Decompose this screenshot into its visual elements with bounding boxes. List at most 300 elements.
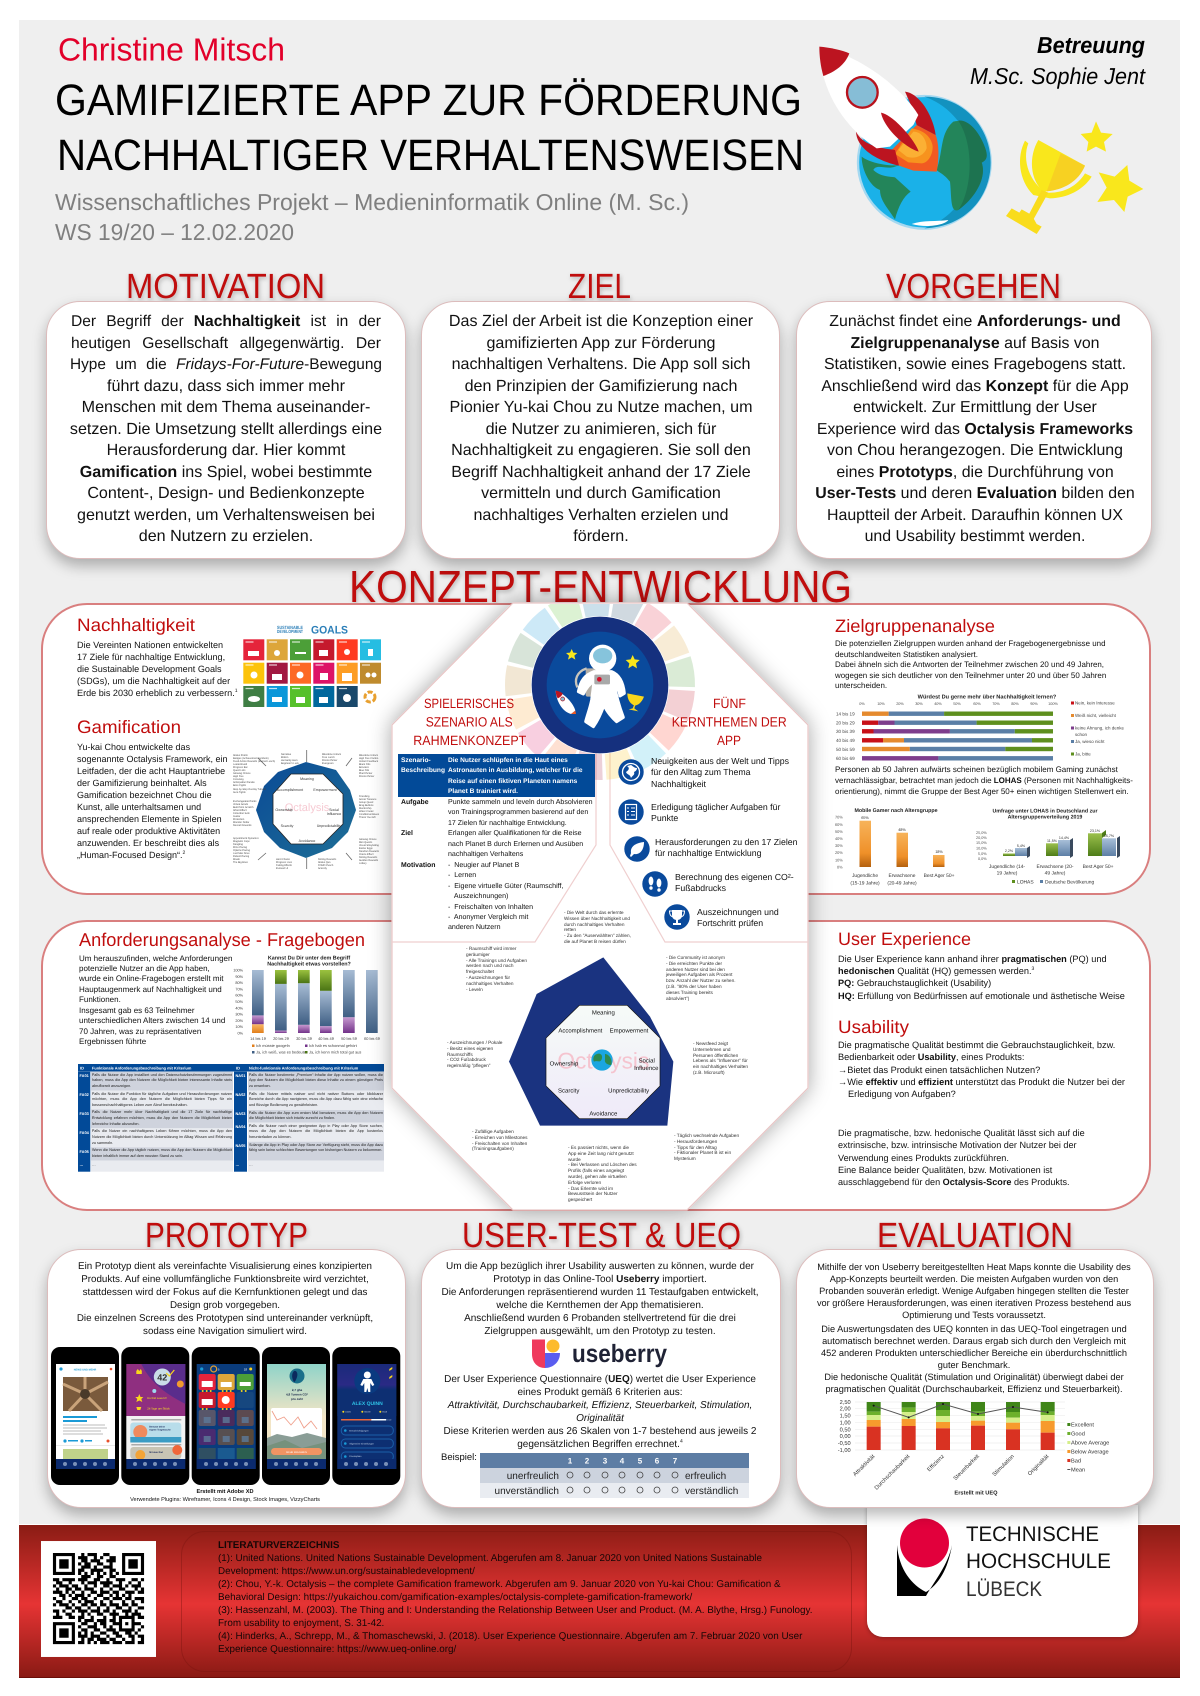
text: evaluation paragraph one: Optimierung und Tests voraussetzt. [902, 1310, 1046, 1320]
chart: Würdest Du gerne mehr über Nachhaltigkeit lernen: 0% [859, 702, 865, 706]
octalysis technique lists: Status Points Badges (Achievement Symbols) Fixed Action Rewards (Earned Lunch) Leaderboard Progress Bar Quest Lists Glowing Choice High Five Crowning Anticipation Parade Boss Fights Step-by-Step Overlay Tutorial Aura Tights [233, 754, 275, 794]
text: UEQ description: Der User Experience Questionnaire (UEQ) wertet die User Experience [444, 1374, 756, 1385]
requirements table: … [236, 1162, 240, 1167]
screen: profile: 15820 [345, 1410, 352, 1414]
text: user test intro: Um die App bezüglich ihrer Usability auswerten zu können, wurde der [446, 1261, 754, 1272]
chart: Mobile Gamer nach Altersgruppe: 40% [835, 836, 843, 841]
text: Gamification: auf reale oder produktive Aktivitäten [77, 826, 220, 836]
literature list: Behavioral Design: https://yukaichou.com/gamification-examples/octalysis-complete-gamification-framework/ [218, 1592, 692, 1603]
logo text: TECHNISCHE [966, 1523, 1099, 1546]
UEQ example scale table: verständlich [685, 1486, 738, 1497]
requirements table: … [80, 1162, 84, 1167]
chart: UEQ benchmark: Steuerbarkeit [952, 1453, 980, 1481]
text: user test intro: Prototyp in das Online-Tool Useberry importiert. [493, 1274, 707, 1285]
chart: Umfrage unter LOHAS: 15,7% [1104, 834, 1115, 838]
requirements table: Solange die App in Play oder App Store zur Verfügung steht, muss die App dazu fähig sein keine schlechten Bewertungen von bisherigen Nutzern zu bekommen. [249, 1142, 383, 1152]
octagon: central concept panel [378, 590, 822, 1224]
logo mark [897, 1518, 952, 1596]
screen: profile: Allgemeine Einstellungen [349, 1442, 375, 1445]
chart: Umfrage unter LOHAS: 49 Jahre) [1045, 870, 1066, 876]
callout: meaning: - Die Welt durch das erlernte Wissen über Nachhaltigkeit und durch nachhaltiges Verhalten retten - Zu den "Auserwählten" zählen, die auf Planet B reisen dürfen [564, 910, 631, 944]
chart: UEQ benchmark: Above Average [1071, 1439, 1109, 1446]
text: Gamification [77, 742, 228, 860]
text: Anforderungsanalyse: Ergebnissen führte [79, 1037, 146, 1046]
theme text: challenges: Herausforderungen zu den 17 Zielen [655, 836, 798, 846]
requirements table: … [92, 1163, 96, 1167]
requirements table: NA01 [236, 1073, 246, 1078]
chart: Würdest Du gerne mehr über Nachhaltigkeit lernen: keine Ahnung, ich denke [1075, 726, 1125, 730]
chart: UEQ benchmark: Below Average [1071, 1448, 1109, 1455]
octalysis technique lists [233, 753, 379, 870]
chart: Umfrage unter LOHAS: Altersgruppenverteilung 2019 [1008, 814, 1082, 820]
text: vorgehen: von Chou herangezogen. Die Entwicklung [827, 442, 1123, 459]
chart: Kannst Du Dir unter dem Begriff Nachhaltigkeit etwas vorstellen: Ja, ich weiß, was es bedeutet [256, 1050, 308, 1054]
text: evaluation paragraph one: Probanden souverän erledigt. Wenige Aufgaben hingegen stellten die Tester [819, 1286, 1129, 1296]
chart: Umfrage unter LOHAS: Jugendliche (14- [989, 864, 1025, 870]
text: motivation: Menschen mit dem Thema auseinander- [82, 398, 370, 416]
icon: checklist [618, 799, 644, 825]
chart: Würdest Du gerne mehr über Nachhaltigkeit lernen: 100% [1048, 702, 1058, 706]
callout: avoidance: - Es passiert nichts, wenn die App eine Zeit lang nicht genutzt wurde - Bei Verlassen und Löschen des Profils (falls eines angelegt wurde), gehen alle virtuellen Erfolge verloren - Das Erlernte wird im Bewusstsein der Nutzer gespeichert [568, 1145, 637, 1202]
octalysis framework diagram: Accomplishment [277, 788, 303, 792]
chart: UEQ benchmark: Erstellt mit UEQ [954, 1489, 998, 1496]
octalysis technique lists: Hard Chains Progress Loss Fading Effects Evolved UI [276, 858, 292, 870]
octalysis framework diagram: Unpredictability [317, 824, 341, 828]
literature list: (4): Hinderks, A., Schrepp, M., & Thomaschewski, J. (2018). User Experience Questionnaire. Abgerufen am 7. Februar 2020 von User [218, 1631, 802, 1642]
text: Zielgruppen intro: unterscheiden. [835, 681, 887, 690]
text: motivation balance: Die pragmatische, bzw. hedonische Qualität lässt sich auf die [838, 1128, 1085, 1138]
chart: Kannst Du Dir unter dem Begriff Nachhaltigkeit etwas vorstellen: 10% [235, 1025, 244, 1029]
text: Gamification: ansprechenden Elemente in Spielen [77, 814, 222, 824]
text: ziel: Das Ziel der Arbeit ist die Konzeption einer [449, 312, 753, 330]
chart: Würdest Du gerne mehr über Nachhaltigkeit lernen: Nein, kein Interesse [1075, 700, 1115, 706]
text: Zielgruppen intro: deutschlandweiten Statistiken analysiert. [835, 650, 978, 658]
chart: UEQ benchmark: Effizienz [926, 1453, 945, 1473]
logo text: HOCHSCHULE [966, 1550, 1111, 1573]
chart: UEQ benchmark [790, 1395, 1140, 1500]
chart: Umfrage unter LOHAS: 19 Jahre) [997, 870, 1018, 876]
chart: Umfrage unter LOHAS: 25,0% [976, 831, 987, 835]
QR code [41, 1541, 156, 1657]
text: Zielgruppen intro [835, 639, 1106, 690]
chart: Umfrage unter LOHAS: 0,0% [978, 857, 987, 861]
screen: profile [337, 1364, 396, 1469]
text: vorgehen: Statistiken, sowie eines Fragebogens statt. [824, 356, 1126, 373]
text: motivation: Hype um die Fridays-For-Future-Bewegung [70, 356, 382, 373]
panel: motivation [46, 301, 406, 559]
UEQ example scale table: 2 [585, 1456, 590, 1466]
chart: Kannst Du Dir unter dem Begriff Nachhaltigkeit etwas vorstellen: 70% [235, 987, 244, 991]
chart: Kannst Du Dir unter dem Begriff Nachhaltigkeit etwas vorstellen: 90% [235, 975, 244, 979]
task and goal text: - Eigene virtuelle Güter (Raumschiff, [448, 883, 563, 890]
chart: Umfrage unter LOHAS: 5,0% [978, 852, 987, 856]
icon: leaf [624, 836, 650, 862]
panel: konzept lower band [41, 920, 1151, 1211]
chart: Umfrage unter LOHAS: LOHAS [1017, 880, 1034, 886]
screen: goals: 18 [244, 1368, 247, 1372]
octalysis technique lists: Glowing Choice Mini Quests Visual Storytelling Easter Eggs Random Rewards Oracle Effect Rolling Rewards Sudden Rewards Lottery [359, 838, 379, 865]
requirements table: FA05 [80, 1149, 90, 1154]
chart: Würdest Du gerne mehr über Nachhaltigkeit lernen: 80% [1011, 702, 1019, 706]
octalysis framework diagram: Avoidance [299, 839, 315, 843]
theme text: awards: Auszeichnungen und [697, 906, 779, 916]
callout: social influence: - Newsfeed zeigt Unternehmen und Personen öffentlichen Lebens als "Influencer" für ein nachhaltiges Verhalten (z.B. Microsoft) [693, 1041, 748, 1075]
text: SPIELERISCHES [424, 696, 514, 711]
chart: Umfrage unter LOHAS: Erwachsene (20- [1037, 864, 1074, 870]
octalysis technique lists: Friending Social Treasure Group Quest Brag Buttons Mentorship Water Cooler Conditional Boxes Thank You Gift [359, 795, 379, 819]
chart: Würdest Du gerne mehr über Nachhaltigkeit lernen: 90% [1030, 702, 1038, 706]
text: Anforderungsanalyse: unterschiedlichen Alters zwischen 14 und [79, 1016, 225, 1025]
text: APP [717, 733, 741, 748]
chart: Mobile Gamer nach Altersgruppe: 18% [935, 850, 943, 854]
text: Gamification: Yu-kai Chou entwickelte das [77, 742, 190, 752]
task and goal text: - Neugier auf Planet B [448, 862, 519, 869]
callout: empowerment: - Die Community ist anonym - Die erreichten Punkte der anderen Nutzer sind bei den jeweiligen Aufgaben als Prozent bzw. Anzahl der Nutzer zu sehen. (z.B. "80% der User haben dieses Training bereits absolviert") [666, 955, 736, 1001]
text: motivation balance: extrinsische, bzw. intrinsische Motivation der Nutzer bei der [838, 1140, 1077, 1150]
text: UEQ description [430, 1373, 770, 1451]
requirements table: Funktionale Anforderungsbeschreibung mit Kriterium [92, 1066, 192, 1070]
illustration: rocket, globe, trophy and stars [819, 46, 1144, 234]
text: UEQ description: Attraktivität, Durchschaubarkeit, Effizienz, Steuerbarkeit, Stimulation, [448, 1400, 752, 1411]
text: LOHAS paragraph [835, 765, 1133, 796]
chart: Würdest Du gerne mehr über Nachhaltigkeit lernen: 60% [973, 702, 981, 706]
icon: footprints [642, 871, 668, 897]
octalysis diagram: Social [638, 1057, 655, 1064]
SDG tile grid: SUSTAINABLE [277, 625, 303, 630]
screen: dashboard: eigene Tragetasche [149, 1428, 171, 1432]
octalysis diagram: Meaning [592, 1009, 615, 1016]
row labels [401, 799, 436, 869]
text: Gamification: „Human-Focused Design“.2 [77, 850, 185, 860]
chart: Würdest Du gerne mehr über Nachhaltigkeit lernen: 20 bis 29 [836, 720, 855, 726]
text: Nachhaltigkeit: Die Vereinten Nationen entwickelten [77, 640, 223, 650]
scenario description text: Szenario- [401, 757, 431, 764]
requirements table: Nicht-funktionale Anforderungsbeschreibung mit Kriterium [249, 1066, 359, 1070]
text: vorgehen: und Usability bestimmt werden. [865, 528, 1085, 545]
UEQ example scale table: 3 [603, 1456, 608, 1466]
chart: Umfrage unter LOHAS [976, 808, 1120, 886]
task and goal text: - Lernen [448, 872, 476, 879]
heading: motivation: MOTIVATION [126, 267, 325, 306]
requirements table: … [249, 1163, 253, 1167]
literature list: (2): Chou, Y.-k. Octalysis – the complete Gamification framework. Abgerufen am 9. Januar 2020 von Yu-kai Chou: Gamification & [218, 1579, 781, 1590]
chart: Mobile Gamer nach Altersgruppe: Mobile Gamer nach Altersgruppe [854, 808, 938, 814]
logo: useberry [531, 1338, 671, 1370]
panel: Anforderungsanalyse: Anforderungsanalyse - Fragebogen [79, 929, 365, 950]
requirements table: FA01 [80, 1073, 90, 1078]
text: vorgehen: Hauptteil der Arbeit. Daraufhin können UX [827, 507, 1123, 524]
octalysis diagram: Accomplishment [558, 1027, 602, 1034]
text: Gamification: sogenannte Octalysis Framework, ein [77, 754, 228, 764]
chart: Mobile Gamer nach Altersgruppe: Jugendliche [852, 873, 878, 879]
chart: Kannst Du Dir unter dem Begriff Nachhaltigkeit etwas vorstellen: 60% [235, 994, 244, 998]
screen: footprint: pro Jahr [291, 1397, 304, 1401]
text: prototyp [55, 1260, 395, 1338]
octalysis framework diagram: Meaning [300, 777, 314, 781]
octalysis technique lists: Milestone Unlock High Five Combo Instant Feedback Blank Fills Boosters Blue Fills Plant Picker Poison Picker [359, 754, 378, 778]
heading: Usability: Usability [838, 1017, 909, 1037]
text: evaluation paragraph two: guter Benchmark. [938, 1360, 1010, 1370]
chart: Kannst Du Dir unter dem Begriff Nachhaltigkeit etwas vorstellen: 50 bis 59 [341, 1036, 357, 1041]
chart: Umfrage unter LOHAS: Umfrage unter LOHAS in Deutschland zur [992, 808, 1098, 814]
screen: goals: 5 [218, 1368, 220, 1372]
heading: Nachhaltigkeit: Nachhaltigkeit [77, 615, 195, 635]
chart: Kannst Du Dir unter dem Begriff Nachhaltigkeit etwas vorstellen: 60 bis 69 [364, 1036, 380, 1041]
chart: Kannst Du Dir unter dem Begriff Nachhaltigkeit etwas vorstellen: Ich müsste googeln [256, 1043, 290, 1048]
faint SDG wheel [505, 604, 695, 780]
text: ziel: vermitteln und durch Gamification [481, 484, 721, 502]
chart: UEQ benchmark: 0,50 [840, 1426, 851, 1433]
author name: Christine Mitsch [58, 32, 285, 68]
chart: Mobile Gamer nach Altersgruppe: 60% [835, 822, 843, 827]
text: Gamification: anzuwenden. Er beschreibt dies als [77, 838, 219, 848]
chart: UEQ benchmark: 2,50 [840, 1399, 851, 1405]
octalysis technique lists: Appointment Dynamics Magnetic Caps Dangling Prize Pacing Options Pacing Last Mile Drive Patient Pacing Moats The Big Boss [233, 837, 259, 864]
panel: ziel [421, 301, 780, 559]
text: ziel: Begriff Nachhaltigkeit anhand der 17 Ziele [451, 463, 751, 481]
chart: Kannst Du Dir unter dem Begriff Nachhaltigkeit etwas vorstellen: 0% [238, 1032, 244, 1036]
chart: Kannst Du Dir unter dem Begriff Nachhaltigkeit etwas vorstellen: 30% [235, 1013, 244, 1017]
text: user test intro: Die Anforderungen repräsentierend wurden 11 Testaufgaben entwickelt, [441, 1287, 759, 1298]
text: RAHMENKONZEPT [413, 733, 526, 748]
text: LOHAS paragraph: vernachlässigbar, betrachtet man jedoch die LOHAS (Personen mit Nachhaltigkeits- [835, 776, 1133, 785]
literature list: (1): United Nations. United Nations Sustainable Development. Abgerufen am 8. Januar 2020 von United Nations Sustainable [218, 1553, 762, 1564]
task and goal text [448, 798, 593, 931]
screen: profile: ALEX QUINN [352, 1401, 383, 1407]
screen: footprint [267, 1364, 326, 1469]
caption: Adobe XD [55, 1488, 395, 1504]
text: UEQ description: Originalität [576, 1413, 624, 1424]
theme text: tasks: Erledigung täglicher Aufgaben für [651, 802, 780, 812]
octalysis technique lists: Narrative Elitism Humanity Hero Beginner's Luck [281, 753, 299, 765]
scenario description body: Die Nutzer schlüpfen in die Haut eines [448, 757, 568, 764]
chart: Würdest Du gerne mehr über Nachhaltigkeit lernen [836, 694, 1125, 761]
chart: Kannst Du Dir unter dem Begriff Nachhaltigkeit etwas vorstellen: 100% [233, 968, 244, 972]
text: Anforderungsanalyse: Insgesamt gab es 63 Teilnehmer [79, 1006, 194, 1015]
scenario description body: Planet B trainiert wird. [448, 788, 518, 795]
text: user test intro: Zielgruppen ausgewählt, um den Prototyp zu testen. [484, 1326, 716, 1337]
text: Usability: →Bietet das Produkt einen tatsächlichen Nutzen? [838, 1064, 1040, 1074]
octalysis diagram: Octalysis [557, 1048, 649, 1073]
requirements table: Falls die Nutzer nach einer geeigneten App in Play oder App Store suchen, muss die App den Nutzern die Möglichkeit bieten die App kostenlos herunterladen zu können. [249, 1124, 383, 1139]
screen: goals [197, 1364, 256, 1469]
text: SZENARIO ALS [426, 714, 513, 730]
text: ziel: nachhaltiges Verhalten erzielen und [473, 506, 728, 524]
logo text [966, 1523, 1111, 1601]
text: ziel: fördern. [573, 527, 629, 545]
chart: UEQ benchmark: 1,00 [840, 1419, 851, 1426]
chart: Mobile Gamer nach Altersgruppe [835, 808, 955, 886]
panel: konzept upper band [41, 603, 1151, 895]
chart: Mobile Gamer nach Altersgruppe: 48% [898, 828, 906, 832]
chart: Würdest Du gerne mehr über Nachhaltigkeit lernen: Weiß nicht, vielleicht [1075, 713, 1117, 718]
requirements table: Falls die Nutzer bestimmte „Premium“-Inhalte der App nutzen wollen, muss die App den Nutzern die Möglichkeit bieten diese Inhalte zu einem günstigen Preis zu erwerben. [249, 1072, 383, 1088]
chart: UEQ benchmark: Good [1071, 1430, 1085, 1437]
UEQ example scale table: 5 [638, 1456, 643, 1466]
task and goal text: Auszeichnungen) [454, 893, 508, 900]
task and goal text: von Trainingsprogrammen basierend auf den [448, 809, 588, 816]
chart: Würdest Du gerne mehr über Nachhaltigkeit lernen: 30% [915, 702, 923, 706]
chart: Kannst Du Dir unter dem Begriff Nachhaltigkeit etwas vorstellen: 20 bis 29 [273, 1036, 289, 1041]
chart: Mobile Gamer nach Altersgruppe: 50% [835, 829, 843, 834]
text: Anforderungsanalyse [79, 954, 232, 1046]
panel: Zielgruppenanalyse [52, 616, 1148, 1592]
screen: footprint: MEHR ERFAHREN [286, 1451, 307, 1454]
UEQ example scale table: 6 [655, 1456, 660, 1466]
screen: news: NEWS UND MEHR [74, 1368, 96, 1372]
label: Beispiel: Beispiel: [441, 1452, 477, 1463]
task and goal text: Punkte sammeln und leveln durch Absolvieren [448, 799, 593, 806]
chart: Umfrage unter LOHAS: Best Ager 50+ [1083, 864, 1114, 870]
screen: profile: Privatsphäre [349, 1455, 362, 1458]
chart: UEQ benchmark: Stimulation [991, 1453, 1015, 1477]
requirements table: Wenn die Nutzer die App täglich nutzen, muss die App den Nutzern die Möglichkeit bieten inhaltlich immer auf dem neusten Stand zu sein. [92, 1148, 232, 1158]
text: user test intro: Anschließend wurden 6 Probanden stellvertretend für die drei [464, 1313, 736, 1324]
text: FÜNF [713, 696, 746, 711]
task and goal text: nach Planet B durch Erlernen und Ausüben [448, 841, 583, 848]
title line 1: GAMIFIZIERTE APP ZUR FÖRDERUNG [55, 76, 802, 125]
heading: ziel: ZIEL [568, 267, 631, 306]
octalysis technique lists: Rolling Rewards Status Quo FOMO Punch Scarcity [318, 858, 336, 870]
text: motivation: genutzt werden, um Verhaltensweisen bei [77, 506, 375, 524]
text: User Experience: PQ: Gebrauchstauglichkeit (Usability) [838, 978, 991, 988]
text: evaluation paragraph two [804, 1322, 1144, 1394]
requirements table: Falls die Nutzer die App installiert und den Datenschutzbestimmungen zugestimmt haben, muss die App den Nutzern die Möglichkeit bieten interessante Inhalte stets abrufbereit anzuzeigen. [92, 1072, 232, 1088]
heading: Fünf Kernthemen [672, 696, 787, 748]
text: Anforderungsanalyse: Um herauszufinden, welche Anforderungen [79, 954, 232, 962]
requirements table: NA05 [236, 1143, 246, 1148]
octalysis framework diagram: Empowerment [313, 788, 337, 792]
chart: UEQ benchmark: Bad [1071, 1457, 1081, 1464]
text: KERNTHEMEN DER [672, 714, 787, 730]
text: Usability: →Wie effektiv und effizient unterstützt das Produkt die Nutzer bei der [838, 1077, 1125, 1087]
text: UEQ description: gegensätzlichen Begriffen errechnet.4 [517, 1439, 683, 1450]
text: motivation: heutigen Gesellschaft allgegenwärtig. Der [71, 335, 381, 352]
text: UEQ description: eines Produkt gemäß 6 Kriterien aus: [517, 1387, 683, 1398]
caption: Adobe XD: Verwendete Plugins: Wireframer, Icons 4 Design, Stock Images, VizzyCharts [130, 1497, 320, 1503]
text: ziel [449, 312, 753, 545]
callout: ownership: - Auszeichnungen / Pokale - Besitz eines eigenen Raumschiffs - CO2 Fußabdruck regelmäßig "pflegen" [447, 1040, 503, 1068]
text: ziel: die Nutzer zu animieren, sich für [486, 420, 716, 438]
chart: Umfrage unter LOHAS: 15,0% [976, 841, 987, 845]
chart: Mobile Gamer nach Altersgruppe: 30% [835, 843, 843, 848]
chart: UEQ benchmark: Durchschaubarkeit [873, 1453, 911, 1491]
chart: Umfrage unter LOHAS: 10,0% [976, 846, 987, 850]
logo text: LÜBECK [966, 1578, 1042, 1601]
chart: Umfrage unter LOHAS: 20,0% [976, 836, 987, 840]
row labels: Motivation [401, 862, 435, 869]
octalysis framework diagram: Influence [327, 812, 341, 816]
literature list: Development: https://www.un.org/sustainabledevelopment/ [218, 1566, 475, 1577]
text: User Experience [838, 954, 1125, 1001]
panel: Zielgruppenanalyse: Zielgruppenanalyse [835, 616, 995, 636]
octalysis diagram: Scarcity [558, 1087, 579, 1094]
text: Gamification: Kunst, alle unterhaltsamen und [77, 802, 201, 812]
text: user test intro [430, 1260, 770, 1338]
chart: UEQ benchmark: 0,00 [840, 1433, 851, 1439]
text: evaluation paragraph one: Mithilfe der von Useberry bereitgestellten Heat Maps konnte die Usability des [817, 1262, 1131, 1272]
text: Nachhaltigkeit: die Sustainable Development Goals [77, 664, 222, 674]
chart: Würdest Du gerne mehr über Nachhaltigkeit lernen: Würdest Du gerne mehr über Nachhaltigkeit lernen? [918, 694, 1057, 700]
chart: Umfrage unter LOHAS: 14,4% [1059, 836, 1070, 840]
panel: User Experience and Usability [52, 616, 1148, 1592]
chart: Kannst Du Dir unter dem Begriff Nachhaltigkeit etwas vorstellen: 20% [235, 1019, 244, 1023]
text: Zielgruppen intro: Dabei ähneln sich die Antworten der Teilnehmer zwischen 20 und 49 Jahren, [835, 660, 1104, 669]
text: User Experience: Die User Experience kann anhand ihrer pragmatischen (PQ) und [838, 954, 1107, 964]
requirements table: Falls die Nutzer mittels nativer und nicht nativer Buttons oder klickbarer Bereiche durch die App navigieren, muss die App dazu fähig sein eine einfache und flüssige Bedienung zu gewährleisten. [249, 1092, 383, 1107]
callout: accomplishment: - Raumschiff wird immer geräumiger - Alle Trainings und Aufgaben werden nach und nach freigeschaltet - Auszeichnungen für nachhaltiges Verhalten - Leveln [466, 946, 527, 992]
task and goal text: nachhaltigen Verhaltens [448, 851, 523, 858]
text: motivation [70, 313, 382, 545]
requirements table: Falls die Nutzer ein nachhaltigeres Leben führen möchten, muss die App den Nutzern die Möglichkeit bieten durch Unterstützung im Alltag Wissen und Erfahrung zu sammeln. [92, 1129, 232, 1145]
chart: Würdest Du gerne mehr über Nachhaltigkeit lernen: 30 bis 39 [836, 729, 855, 734]
supervisor label: Betreuung [1037, 32, 1145, 58]
callout: scarcity: - Zufällige Aufgaben - Erreichen von Milestones - Freischalten von Inhalten (Trainingsaufgaben) [472, 1129, 528, 1151]
text: User Experience: hedonischen Qualität (HQ) gemessen werden.3 [838, 966, 1034, 976]
text: ziel: den Prinzipien der Gamifizierung nach [465, 377, 737, 395]
title line 2: NACHHALTIGER VERHALTENSWEISEN [57, 131, 804, 180]
octalysis diagram: Ownership [550, 1060, 578, 1067]
theme text: challenges: für nachhaltige Entwicklung [655, 848, 762, 858]
octalysis framework diagram [256, 750, 356, 869]
requirements table: Falls die Nutzer die Funktion für tägliche Aufgaben und Herausforderungen nutzen möchten, muss die App den Nutzern die Möglichkeit bieten Tipps für ein besseres/nachhaltigeres Leben zum Abruf bereitzuhalten. [92, 1092, 232, 1107]
row labels: Aufgabe [401, 799, 429, 806]
chart: Kannst Du Dir unter dem Begriff Nachhaltigkeit etwas vorstellen: 50% [235, 1000, 244, 1004]
logo: useberry: useberry [572, 1340, 667, 1368]
chart: Würdest Du gerne mehr über Nachhaltigkeit lernen: 60 bis 69 [836, 756, 855, 761]
text: LOHAS paragraph: Personen ab 50 Jahren aufwärts scheinen bezüglich mobilem Gaming zunächst [835, 765, 1118, 774]
chart: Würdest Du gerne mehr über Nachhaltigkeit lernen: Ja, wieso nicht [1075, 739, 1105, 744]
theme text: footprint [675, 872, 794, 895]
text: ziel: Pionier Yu-kai Chou zu Nutze machen, um [450, 398, 752, 416]
text: Usability [838, 1040, 1125, 1099]
theme text: footprint: Berechnung des eigenen CO²- [675, 872, 794, 882]
text: motivation balance: Verwendung eines Produkts zurückführen. [838, 1153, 1009, 1163]
text: ziel: Nachhaltigkeit zu engagieren. Sie soll den [451, 441, 751, 459]
text: evaluation paragraph two: Die hedonische Qualität (Stimulation und Originalität) überwiegt dabei der [824, 1372, 1124, 1382]
text: Usability: Die pragmatische Qualität bestimmt die Gebrauchstauglichkeit, bzw. [838, 1040, 1115, 1050]
text: motivation: Content-, Design- und Bedienkonzepte [87, 484, 365, 502]
literature list: From usability to enjoyment, S. 31-42. [218, 1618, 384, 1629]
heading: Gamification: Gamification [77, 717, 181, 737]
chart: Kannst Du Dir unter dem Begriff Nachhaltigkeit etwas vorstellen: Kannst Du Dir unter dem Begriff [268, 956, 350, 962]
UEQ example scale table: 7 [673, 1456, 678, 1466]
chart: Mobile Gamer nach Altersgruppe: 70% [835, 814, 843, 820]
text: vorgehen: Zunächst findet eine Anforderungs- und [829, 313, 1121, 330]
chart: Kannst Du Dir unter dem Begriff Nachhaltigkeit etwas vorstellen: 14 bis 19 [250, 1036, 266, 1041]
octalysis diagram: Avoidance [589, 1110, 617, 1117]
requirements table: FA03 [80, 1111, 90, 1116]
text: vorgehen: Anschließend wird das Konzept für die App [821, 378, 1129, 395]
UEQ example scale table: 1 [568, 1456, 573, 1466]
text: Zielgruppen intro: wogegen sie sich deutlicher von den Teilnehmer unter 20 und über 50 Jahren [835, 670, 1106, 680]
requirements table: NA04 [236, 1124, 246, 1129]
text: Anforderungsanalyse: wurde ein Online-Fragebogen erstellt mit [79, 974, 224, 983]
octalysis diagram: Empowerment [610, 1027, 648, 1034]
screen: dashboard: Du bist Level 2! [147, 1396, 167, 1400]
text: ziel: nachhaltigen Verhaltens. Die App soll sich [452, 355, 750, 373]
chart: Würdest Du gerne mehr über Nachhaltigkeit lernen: 70% [992, 702, 1000, 706]
chart: Würdest Du gerne mehr über Nachhaltigkeit lernen: 40 bis 49 [836, 738, 855, 743]
requirements table: Falls die Nutzer die App zum ersten Mal benutzen, muss die App den Nutzern die Möglichkeit bieten sich intuitiv zurecht zu finden. [249, 1110, 383, 1120]
UEQ example scale table: 4 [620, 1456, 625, 1466]
chart: Würdest Du gerne mehr über Nachhaltigkeit lernen: 14 bis 19 [836, 712, 855, 716]
screen: dashboard [126, 1364, 185, 1469]
screen: footprint: 2,7 gha [292, 1388, 302, 1392]
text: Nachhaltigkeit: (SDGs), um die Nachhaltigkeit auf der [77, 676, 230, 686]
text: motivation: Der Begriff der Nachhaltigkeit ist in der [71, 313, 381, 330]
screen: news [56, 1364, 115, 1469]
